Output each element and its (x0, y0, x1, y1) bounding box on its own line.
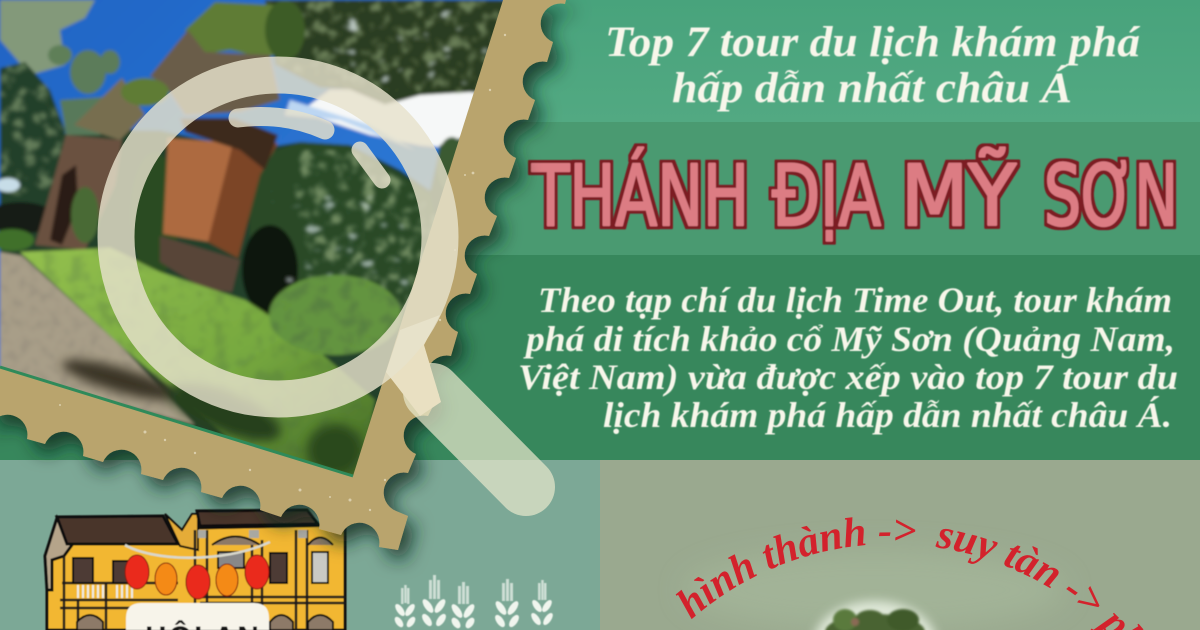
left bush (0, 229, 34, 251)
stone path (0, 252, 195, 425)
right bush (269, 275, 401, 355)
house walls (47, 525, 345, 630)
left roof (57, 516, 178, 544)
grass (20, 248, 375, 490)
text block: intro paragraph: Việt Nam) vừa được xếp vào top 7 tour du (518, 357, 1178, 397)
brick right face (208, 143, 278, 258)
stamp frame (0, 0, 566, 550)
shrub beside tower (134, 156, 176, 270)
icon: wheat stalks (393, 575, 555, 630)
wheat stalk 5 (529, 580, 555, 627)
title: Thánh địa Mỹ Sơn: MỸ (901, 147, 1017, 245)
background: top green band (0, 0, 1200, 122)
lantern string (125, 542, 270, 558)
left tower moss (71, 187, 99, 243)
house pillar caps (198, 530, 307, 538)
tree mottling top right (265, 0, 505, 95)
ground and foliage base (0, 128, 460, 436)
brick left face (163, 138, 235, 242)
label plate: Hoi An (126, 603, 269, 630)
top right dark tree (265, 0, 510, 105)
ruin wall (150, 30, 280, 115)
photo edge line (0, 367, 353, 476)
grass mottling (43, 249, 322, 426)
title: Thánh địa Mỹ Sơn: THÁNH (531, 147, 749, 245)
tree mottling left (0, 62, 65, 200)
photo content (0, 0, 515, 495)
tree sky gaps right (282, 194, 410, 290)
wheat stalk 3 (450, 582, 476, 630)
tower dark cornice (180, 118, 278, 170)
balcony rail (78, 585, 132, 598)
bright clouds (300, 90, 480, 150)
moss on left roof (121, 78, 169, 106)
shadows on ground (59, 352, 181, 408)
lens highlight long (238, 116, 325, 130)
photo: Champa brick towers at My Son (0, 0, 515, 495)
photo medallion: My Son trees (813, 601, 937, 630)
wheat stalk 1 (393, 585, 417, 629)
background: bottom right panel (600, 460, 1200, 630)
stone mottling (9, 269, 130, 384)
sky (0, 0, 503, 366)
center gable (165, 514, 198, 550)
magnifier neck (386, 315, 441, 416)
right roof (197, 510, 318, 526)
right mid tree (242, 135, 459, 314)
right bush mottling (269, 275, 401, 355)
tree highlights right (294, 148, 423, 310)
wheat stalk 2 (420, 575, 448, 628)
tower base (160, 236, 240, 292)
heading: top 7 tours: Top 7 tour du lịch khám phá (605, 19, 1141, 66)
lens highlight short (360, 150, 382, 180)
heading: top 7 tours: hấp dẫn nhất châu Á (672, 65, 1072, 112)
left tower roof (74, 78, 145, 140)
stamp speckles (59, 34, 506, 511)
sky gap lower left (0, 178, 20, 192)
background: title band (0, 122, 1200, 255)
title: Thánh địa Mỹ Sơn: ĐỊA (772, 147, 881, 245)
lanterns (125, 555, 269, 599)
illustration: Hoi An house (45, 510, 345, 630)
house windows (73, 536, 333, 630)
title: Thánh địa Mỹ Sơn (531, 147, 1178, 245)
left tower arch (50, 165, 78, 245)
left background trees (0, 0, 130, 135)
wheat stalk 4 (493, 579, 521, 629)
icon: magnifying glass (116, 75, 526, 487)
left gable (45, 518, 72, 590)
text block: intro paragraph (518, 280, 1178, 435)
magnifier ring (116, 75, 440, 399)
background: bottom left panel (0, 460, 600, 630)
text block: intro paragraph: lịch khám phá hấp dẫn nhất châu Á. (603, 395, 1172, 435)
background: intro band (0, 255, 1200, 460)
tree sky gaps top right (332, 8, 491, 87)
left dark tree (0, 62, 65, 234)
house structure lines (60, 530, 345, 630)
moss on ruin top (185, 0, 305, 60)
text block: intro paragraph: phá di tích khảo cổ Mỹ Sơn (Quảng Nam, (523, 319, 1175, 359)
heading: top 7 tours (605, 19, 1141, 112)
text block: intro paragraph: Theo tạp chí du lịch Time Out, tour khám (538, 280, 1172, 320)
magnifier handle (432, 392, 526, 487)
left tower body (35, 135, 122, 250)
